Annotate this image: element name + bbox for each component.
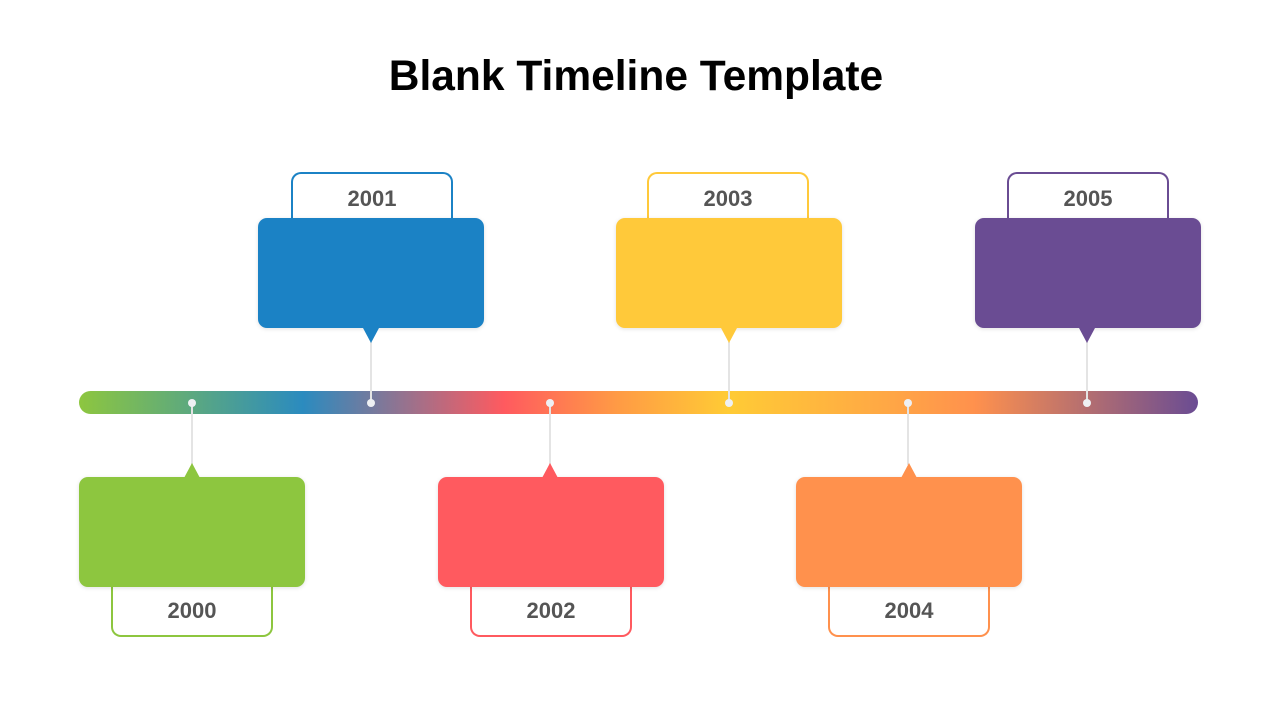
- card: 2000: 2000: [168, 598, 216, 623]
- card: 2000: [78, 463, 306, 637]
- card: 2002: [437, 463, 665, 637]
- card: 2001: 2001: [348, 186, 396, 211]
- card: 2002: 2002: [527, 598, 575, 623]
- card: 2005: [974, 172, 1202, 343]
- timeline bar: [79, 391, 1198, 414]
- card: 2004: [795, 463, 1023, 637]
- card: 2004: 2004: [885, 598, 933, 623]
- card: 2003: 2003: [704, 186, 752, 211]
- card: 2001: [257, 172, 485, 343]
- card: 2003: [615, 172, 843, 343]
- card: 2005: 2005: [1064, 186, 1112, 211]
- title: Blank Timeline Template: [389, 53, 883, 100]
